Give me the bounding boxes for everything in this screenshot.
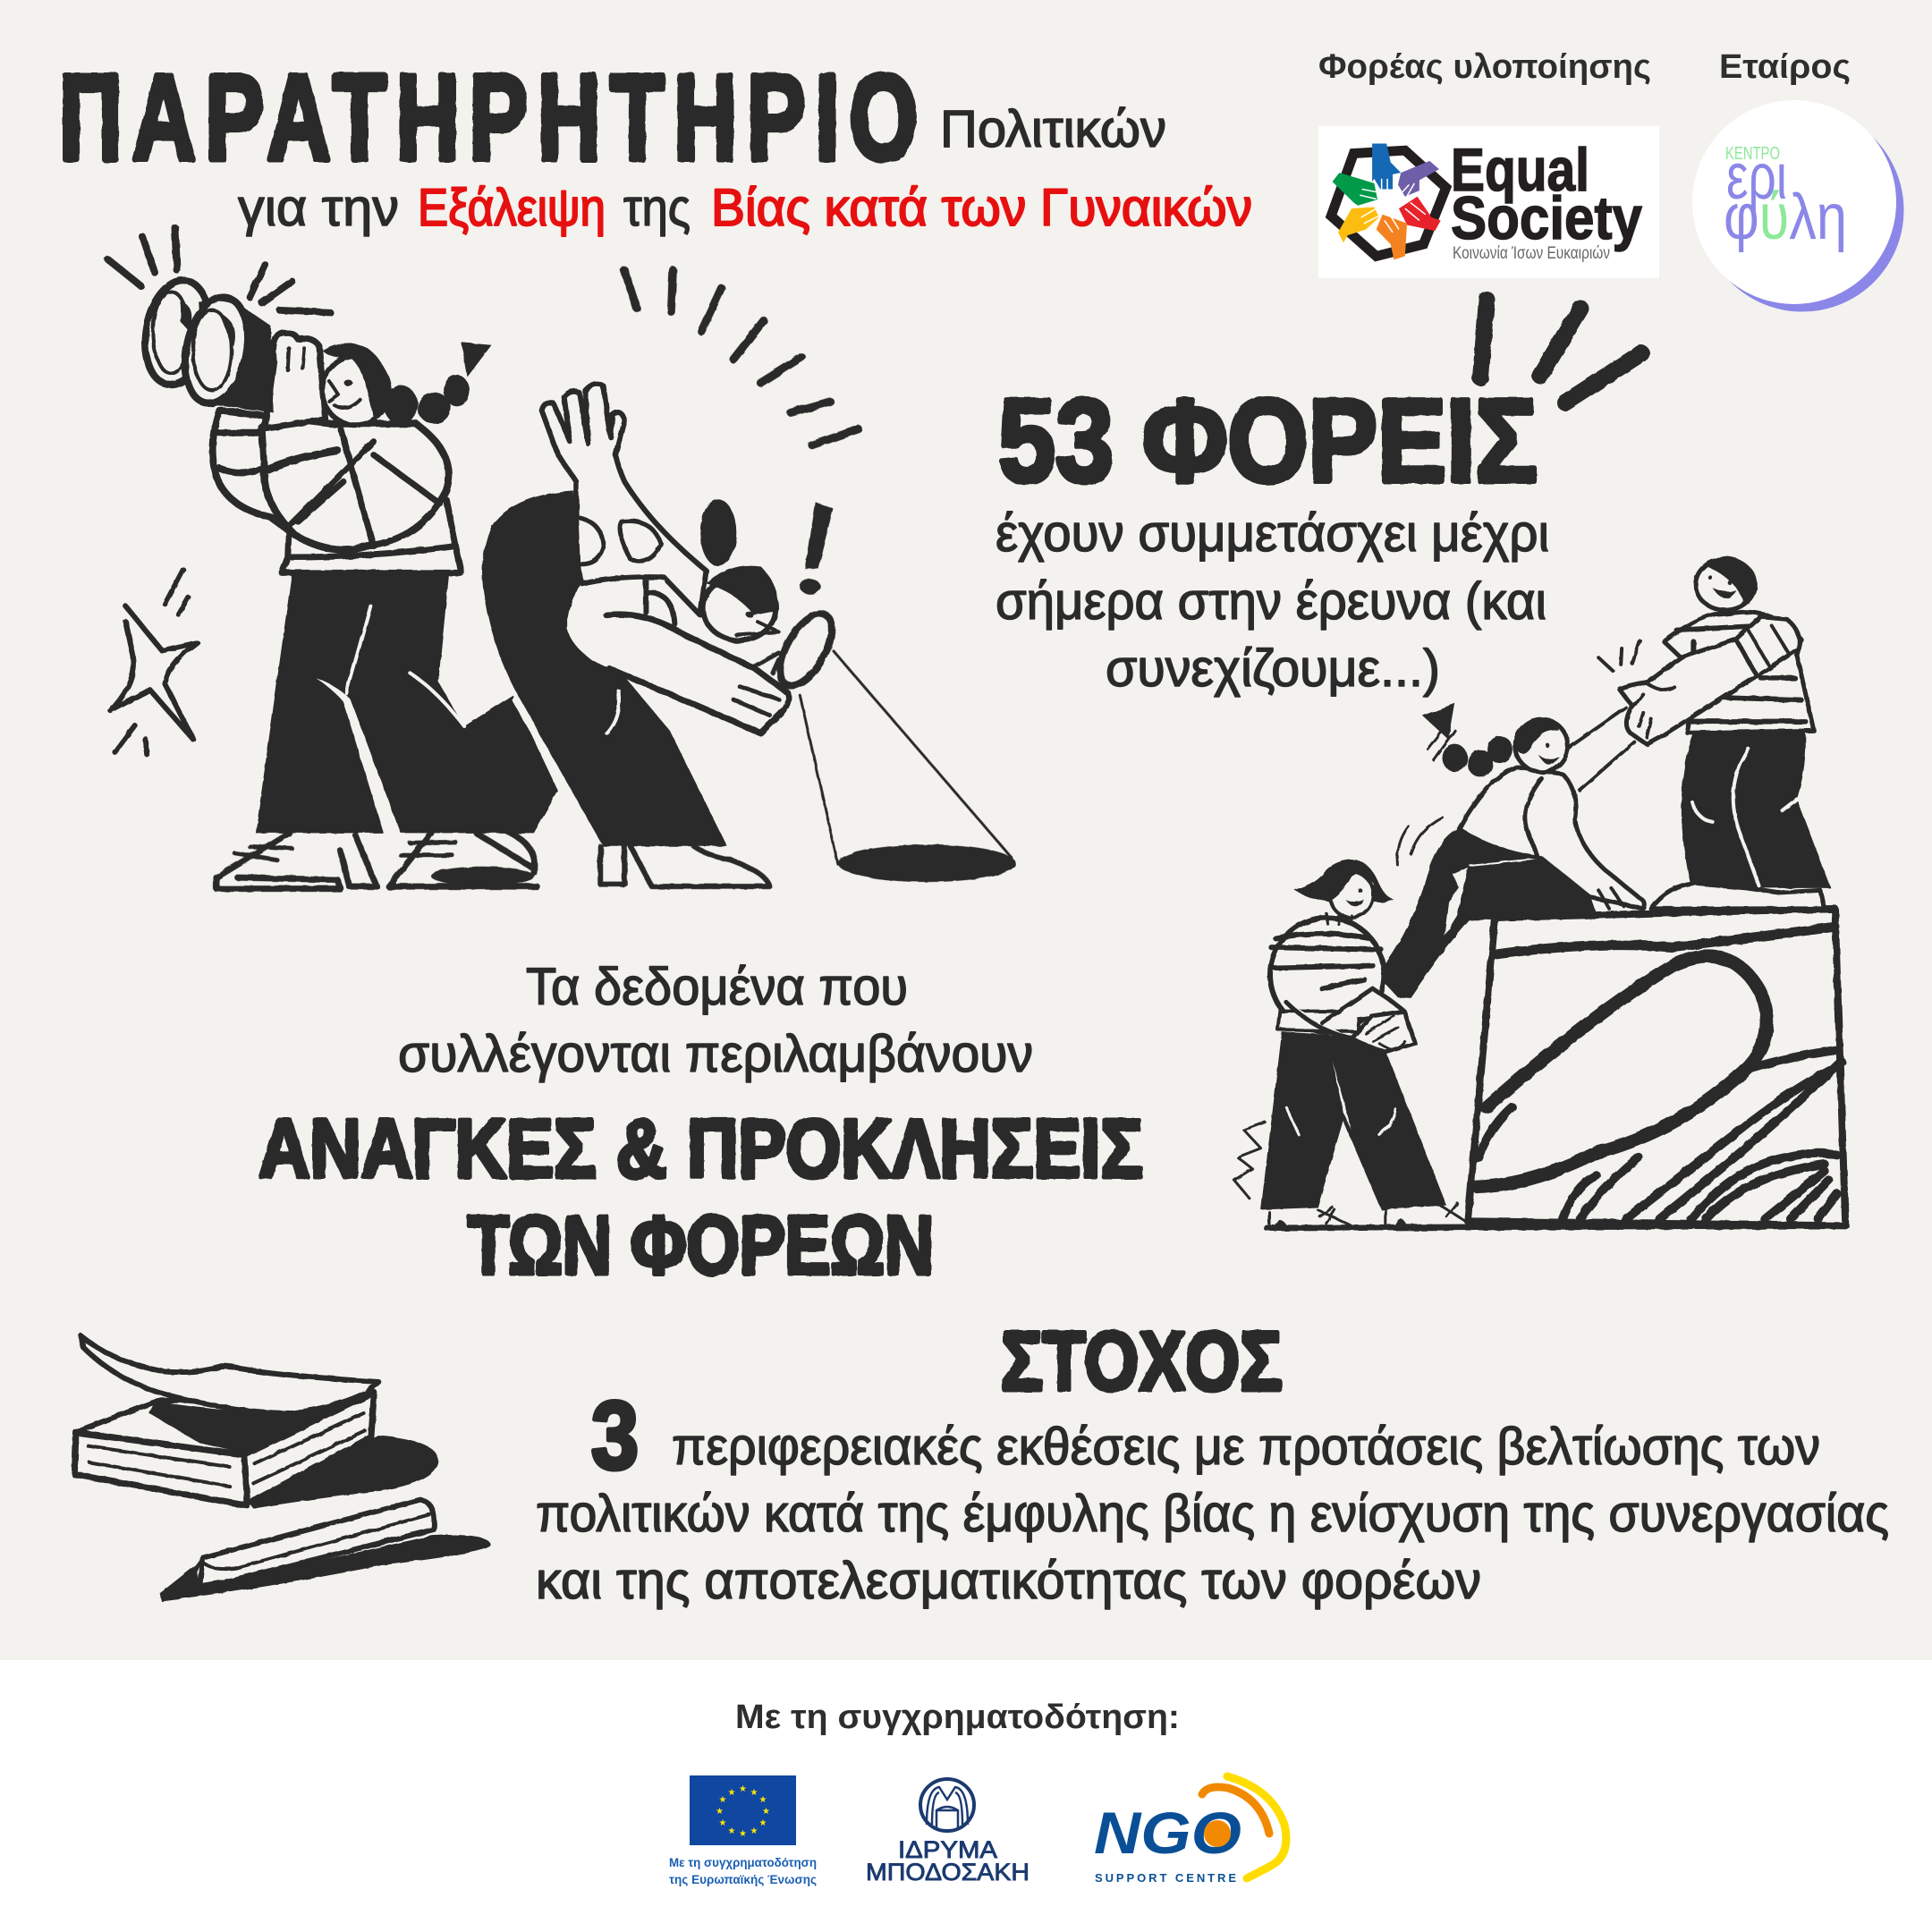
logo: Kentro Erifyli <box>1692 100 1903 311</box>
text: collected data intro: Τα δεδομένα που <box>526 958 908 1016</box>
heading: goal: ΣΤΟΧΟΣ <box>1001 1314 1282 1408</box>
subtitle line: της <box>623 179 691 237</box>
big number 3: 3 <box>591 1381 639 1489</box>
logo: Equal Society: Equal <box>1451 136 1589 204</box>
logo: EU flag: Με τη συγχρηματοδότηση <box>669 1855 817 1869</box>
logo: EU flag: ★ <box>716 1807 724 1817</box>
icon: emphasis rays <box>1480 300 1641 402</box>
implementing body heading: Φορέας υλοποίησης <box>1318 48 1651 86</box>
logo: EU flag: ★ <box>762 1807 770 1817</box>
subtitle line: Βίας κατά των Γυναικών <box>711 179 1252 237</box>
text: collected data intro: συλλέγονται περιλαμβάνουν <box>398 1025 1033 1083</box>
icon: hand sparks <box>1598 640 1640 672</box>
footer band <box>0 1660 1932 1932</box>
text: participation: συνεχίζουμε...) <box>1106 640 1440 698</box>
logo: EU flag: ★ <box>759 1795 767 1805</box>
logo: Equal Society: Society <box>1451 184 1642 252</box>
text: collected data intro <box>398 958 1033 1083</box>
logo: EU flag: ★ <box>719 1818 727 1828</box>
pencil <box>159 1500 490 1601</box>
heading: 53 organisations: 53 ΦΟΡΕΙΣ <box>998 375 1538 506</box>
logo: Kentro Erifyli: φύλη <box>1724 182 1847 253</box>
text: goal description <box>536 1418 1889 1610</box>
text: participation: σήμερα στην έρευνα (και <box>996 572 1546 631</box>
partner heading: Εταίρος <box>1719 48 1851 86</box>
text: goal description: και της αποτελεσματικότητας των φορέων <box>536 1552 1481 1610</box>
icon: zigzag <box>1234 1123 1265 1199</box>
figure: woman climbing <box>1377 703 1644 997</box>
heading: needs and challenges <box>258 1102 1143 1292</box>
figure: woman with magnifying glass <box>482 384 843 886</box>
subtitle word: Πολιτικών <box>940 100 1166 158</box>
figure: woman with binoculars <box>139 278 558 834</box>
box <box>1463 909 1845 1225</box>
text: participation: έχουν συμμετάσχει μέχρι <box>996 504 1549 563</box>
logo: EU flag: ★ <box>750 1826 758 1836</box>
subtitle line: για την <box>238 179 399 237</box>
illustration: women searching <box>107 228 1016 889</box>
logo: EU flag: ★ <box>739 1784 747 1794</box>
figure: shoes of first woman <box>216 831 537 889</box>
heading: needs and challenges: ΑΝΑΓΚΕΣ & ΠΡΟΚΛΗΣΕΙΣ <box>258 1102 1143 1195</box>
icon: sparkle star <box>111 570 197 754</box>
icon: binocular rays <box>107 228 330 312</box>
text: participation <box>996 504 1549 698</box>
logo: EU flag: ★ <box>728 1788 736 1798</box>
subtitle line: Εξάλειψη <box>418 179 606 237</box>
logo: Kentro Erifyli: ερι <box>1726 141 1787 213</box>
logo: EU flag: ★ <box>719 1795 727 1805</box>
logo: Bodossaki Foundation: ΙΔΡΥΜΑ <box>898 1836 997 1863</box>
book shadow <box>248 1436 438 1509</box>
co-funding heading: Με τη συγχρηματοδότηση: <box>735 1699 1180 1736</box>
illustration: book and pencil <box>74 1335 490 1601</box>
logo: Bodossaki Foundation: ΜΠΟΔΟΣΑΚΗ <box>866 1859 1030 1885</box>
heading: needs and challenges: ΤΩΝ ΦΟΡΕΩΝ <box>468 1199 934 1292</box>
figure: floor and shoes <box>1267 1203 1845 1228</box>
figure: woman supporting <box>1261 860 1446 1210</box>
illustration: people climbing box <box>1234 559 1845 1228</box>
logo: EU flag: ★ <box>750 1788 758 1798</box>
icon: search rays <box>624 270 859 445</box>
logo: NGO Support Centre <box>1094 1776 1286 1885</box>
text: goal description: περιφερειακές εκθέσεις με προτάσεις βελτίωσης των <box>672 1418 1820 1476</box>
logo: Equal Society <box>1318 126 1659 278</box>
logo: Kentro Erifyli: ΚΕΝΤΡΟ <box>1725 144 1780 164</box>
logo: Bodossaki Foundation <box>866 1779 1030 1885</box>
logo: NGO Support Centre: NGO <box>1094 1800 1241 1866</box>
logo: EU flag <box>669 1775 817 1886</box>
text: goal description: πολιτικών κατά της έμφυλης βίας η ενίσχυση της συνεργασίας <box>536 1485 1889 1543</box>
book <box>74 1335 378 1505</box>
logo: Equal Society: Κοινωνία Ίσων Ευκαιριών <box>1453 244 1610 263</box>
subtitle line <box>238 179 1252 237</box>
icon: magnifier light cone <box>800 650 1016 882</box>
figure: man on top <box>1569 559 1831 909</box>
logo: EU flag: της Ευρωπαϊκής Ένωσης <box>669 1872 817 1886</box>
logo: EU flag: ★ <box>739 1829 747 1839</box>
logo: EU flag: ★ <box>728 1826 736 1836</box>
title: ΠΑΡΑΤΗΡΗΤΗΡΙΟ <box>59 50 918 186</box>
logo: NGO Support Centre: SUPPORT CENTRE <box>1095 1871 1236 1885</box>
logo: EU flag: ★ <box>759 1818 767 1828</box>
